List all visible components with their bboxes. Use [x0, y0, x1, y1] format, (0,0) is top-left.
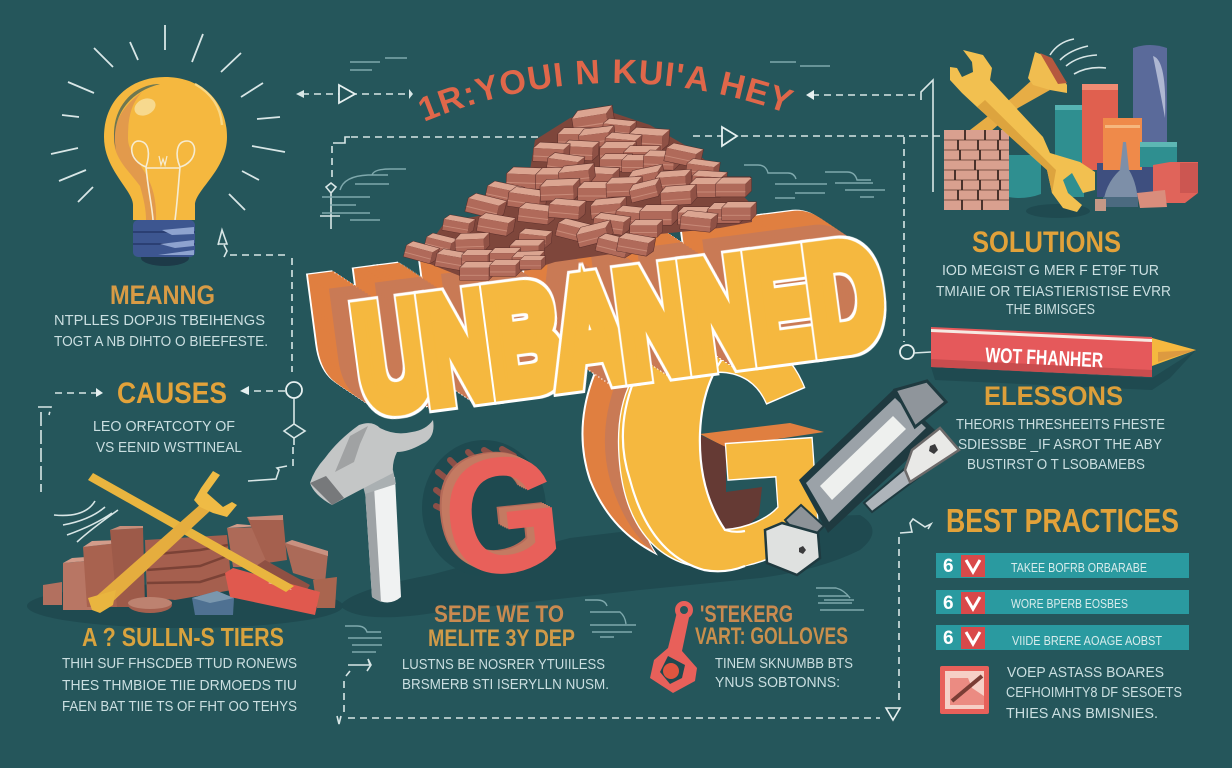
text block: stickers: VART: GOLLOVES	[695, 623, 848, 650]
text block: best practices note	[1006, 664, 1182, 722]
text block: lessons: THEORIS THRESHEEITS FHESTE	[956, 416, 1165, 433]
big G: heavy left bowl	[623, 355, 760, 571]
icon: brick pile	[404, 106, 756, 280]
text block: causes: CAUSES	[117, 377, 227, 410]
checklist row 1: 6	[943, 556, 954, 577]
headline word: front face letters: D	[799, 212, 892, 382]
checklist row 1	[936, 553, 1189, 578]
headline word: front face letters: N	[608, 237, 702, 407]
icon: red hex key	[650, 601, 697, 693]
text block: solutions: SOLUTIONS	[972, 226, 1121, 259]
small red G: G	[434, 417, 571, 613]
checklist row 3: VIIDE BRERE AOAGE AOBST	[1012, 633, 1162, 648]
heading: best practices: BEST PRACTICES	[946, 502, 1179, 539]
text block: bottom left: THES THMBIOE TIIE DRMOEDS TIU	[62, 677, 297, 694]
text block: lessons: BUSTIRST O T LSOBAMEBS	[967, 456, 1145, 473]
icon: wrench over brick rubble	[27, 471, 343, 628]
connector: bottom dashed frame	[337, 519, 931, 724]
sketch clouds	[322, 58, 885, 652]
canisters	[1133, 45, 1167, 143]
icon: hammer	[310, 420, 434, 602]
icon: light bulb	[51, 25, 285, 266]
headline word: front face letters: B	[477, 255, 571, 424]
text block: bottom left: THIH SUF FHSCDEB TTUD RONEWS	[62, 655, 297, 672]
connector: top left arrow to title	[296, 85, 413, 103]
checklist row 2: 6	[943, 593, 954, 614]
banner: red pencil: WOT FHANHER	[985, 344, 1104, 372]
text block: solutions: THE BIMISGES	[1006, 301, 1095, 318]
text block: bottom left	[62, 622, 297, 715]
text block: best practices note: THIES ANS BMISNIES.	[1006, 705, 1158, 722]
second wrench	[970, 80, 1050, 132]
text block: see we to: BRSMERB STI ISERYLLN NUSM.	[402, 676, 609, 693]
text block: meaning: MEANNG	[110, 280, 215, 310]
headline word: front face letters: N	[674, 229, 767, 398]
text block: solutions: TMIAIIE OR TEIASTIERISTISE EVRR	[936, 283, 1171, 300]
headline word: front face letters: U	[347, 272, 440, 441]
text block: see we to: MELITE 3Y DEP	[428, 625, 575, 652]
main wrench	[950, 50, 1095, 212]
text block: best practices note: CEFHOIMHTY8 DF SESOETS	[1006, 684, 1182, 701]
text block: stickers	[695, 601, 853, 691]
text block: solutions: IOD MEGIST G MER F ET9F TUR	[942, 262, 1159, 279]
text block: see we to: LUSTNS BE NOSRER YTUIILESS	[402, 656, 605, 673]
text block: causes: LEO ORFATCOTY OF	[93, 418, 235, 435]
brick wall	[944, 130, 1009, 210]
text block: causes: VS EENID WSTTINEAL	[96, 439, 242, 456]
big G: front face: G	[595, 260, 842, 642]
checklist row 3	[936, 625, 1189, 650]
connector: dashed frame behind brick pile	[320, 127, 945, 359]
banner: red pencil	[931, 327, 1196, 390]
big G: side walls and inner shading	[582, 355, 824, 553]
text block: solutions	[936, 226, 1171, 318]
text block: lessons	[956, 381, 1165, 473]
checklist row 2: WORE BPERB EOSBES	[1011, 596, 1128, 611]
headline word: front face letters: A	[543, 246, 637, 415]
text block: lessons: SDIESSBE _IF ASROT THE ABY	[958, 436, 1162, 453]
checklist row 3: 6	[943, 628, 954, 649]
text block: stickers: TINEM SKNUMBB BTS	[715, 655, 853, 672]
text block: bottom left: FAEN BAT TIIE TS OF FHT OO TEHYS	[62, 698, 297, 715]
text block: lessons: ELESSONS	[984, 381, 1123, 411]
title: 1R:YOUI N KUI'A HEY	[419, 60, 794, 122]
text block: see we to: SEDE WE TO	[434, 601, 564, 628]
connector: top right arrow to tools	[806, 80, 933, 192]
text block: meaning: NTPLLES DOPJIS TBEIHENGS	[54, 312, 265, 329]
icon: marker pen tool	[765, 381, 959, 575]
filament	[132, 141, 195, 220]
headline word: 3D extrusion: UNBANNED	[347, 213, 888, 441]
text block: stickers: YNUS SOBTONNS:	[715, 674, 840, 691]
text block: best practices note: VOEP ASTASS BOARES	[1007, 664, 1164, 681]
headline word: front face letters: E	[739, 221, 826, 390]
text block: bottom left: A ? SULLN-S TIERS	[82, 622, 284, 652]
text block: see we to	[402, 601, 609, 693]
rays	[51, 25, 285, 210]
bulb base	[133, 220, 195, 257]
text block: causes	[93, 377, 242, 456]
text block: stickers: 'STEKERG	[700, 601, 793, 628]
headline word: front face letters: N	[412, 263, 506, 433]
dark disc behind small G	[422, 440, 546, 576]
ground shadow under central letters	[340, 515, 872, 617]
connector: meaning and causes column	[38, 230, 305, 492]
icon: red note	[940, 666, 989, 714]
checklist row 2	[936, 590, 1189, 614]
text block: meaning	[54, 280, 268, 350]
text block: meaning: TOGT A NB DIHTO O BIEEFESTE.	[54, 333, 268, 350]
checklist row 1: TAKEE BOFRB ORBARABE	[1011, 560, 1147, 575]
icon: wrench and canisters	[944, 39, 1198, 218]
